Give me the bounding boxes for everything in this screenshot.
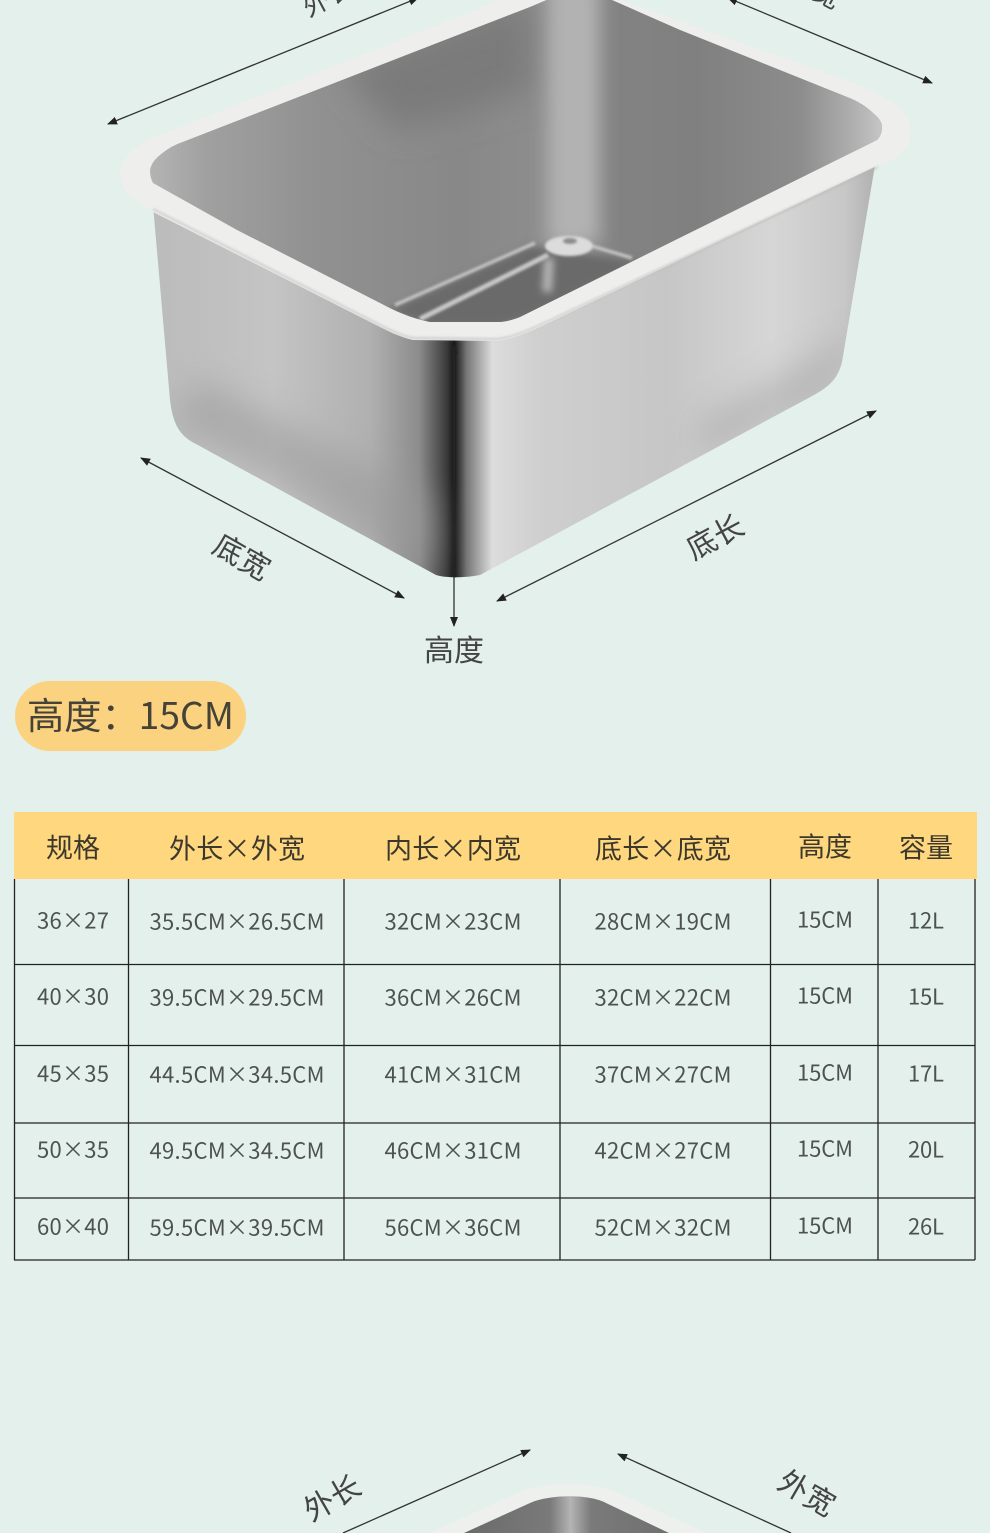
dimension arrow: outer width (bottom) xyxy=(618,1454,791,1533)
label: bottom length: 底长 xyxy=(677,501,751,569)
table row: 40×30: 15L xyxy=(908,980,944,1012)
table header row: 内长×内宽 xyxy=(385,828,521,866)
badge background xyxy=(15,681,246,751)
table row: 40×30: 39.5CM×29.5CM xyxy=(150,980,324,1012)
table row: 60×40 xyxy=(37,1208,944,1242)
dimension arrow: outer length (top) xyxy=(108,0,418,124)
dimension arrow: height xyxy=(453,345,455,626)
table row: 40×30 xyxy=(37,978,944,1012)
table row: 50×35: 49.5CM×34.5CM xyxy=(150,1134,324,1166)
table row: 36×27: 32CM×23CM xyxy=(384,904,522,936)
dimension arrow: outer length (bottom) xyxy=(343,1450,530,1533)
table row: 60×40: 52CM×32CM xyxy=(594,1210,732,1242)
table header row: 规格 xyxy=(46,826,100,866)
dimension arrow: bottom length xyxy=(497,411,876,601)
table row: 50×35: 42CM×27CM xyxy=(594,1134,732,1166)
table row: 45×35 xyxy=(37,1056,944,1090)
sink product illustration (bottom, cropped) xyxy=(429,1484,707,1533)
table row: 50×35 xyxy=(37,1132,944,1166)
table row: 45×35: 41CM×31CM xyxy=(384,1058,522,1090)
sink inner basin xyxy=(140,0,890,330)
table header row: 高度 xyxy=(798,826,852,864)
table row: 50×35: 15CM xyxy=(797,1132,853,1164)
badge text: 高度：15CM xyxy=(27,686,234,740)
table row: 36×27: 36×27 xyxy=(37,904,109,936)
basin floor xyxy=(388,246,640,326)
table row: 60×40: 15CM xyxy=(797,1208,853,1240)
table row: 60×40: 26L xyxy=(908,1210,944,1242)
label: outer width (bottom): 外宽 xyxy=(771,1457,845,1525)
table grid xyxy=(14,879,975,1260)
inner basin xyxy=(464,1496,669,1533)
table header row: 底长×底宽 xyxy=(595,828,731,866)
table row: 60×40: 60×40 xyxy=(37,1210,109,1242)
table row: 50×35: 50×35 xyxy=(37,1132,109,1164)
table row: 50×35: 20L xyxy=(908,1132,944,1164)
table row: 36×27: 28CM×19CM xyxy=(594,904,732,936)
specification table xyxy=(14,812,977,1260)
table row: 50×35: 46CM×31CM xyxy=(384,1134,522,1166)
table row: 45×35: 17L xyxy=(908,1056,944,1088)
table header row: 外长×外宽 xyxy=(169,828,305,866)
table row: 40×30: 36CM×26CM xyxy=(384,980,522,1012)
table row: 60×40: 56CM×36CM xyxy=(384,1210,522,1242)
dimension arrow: outer width (top) xyxy=(728,0,932,83)
table row: 40×30: 40×30 xyxy=(37,980,109,1012)
sink body faces xyxy=(140,160,884,590)
label: outer length (bottom): 外长 xyxy=(294,1462,368,1530)
table row: 60×40: 59.5CM×39.5CM xyxy=(150,1210,324,1242)
rim xyxy=(429,1484,707,1533)
sink rim xyxy=(120,0,910,341)
table row: 36×27: 35.5CM×26.5CM xyxy=(150,904,324,936)
table row: 36×27 xyxy=(37,902,944,936)
table row: 45×35: 37CM×27CM xyxy=(594,1058,732,1090)
label: height: 高度 xyxy=(424,626,484,670)
table header row: 容量 xyxy=(899,826,953,866)
table header row xyxy=(14,812,977,879)
table row: 45×35: 45×35 xyxy=(37,1056,109,1088)
label: bottom width: 底宽 xyxy=(206,521,280,589)
sink product illustration (top) xyxy=(120,0,910,590)
table row: 36×27: 15CM xyxy=(797,902,853,934)
rim lip shading xyxy=(153,167,878,339)
table row: 45×35: 44.5CM×34.5CM xyxy=(150,1058,324,1090)
table row: 40×30: 15CM xyxy=(797,978,853,1010)
dimension arrow: bottom width xyxy=(141,458,404,598)
table row: 45×35: 15CM xyxy=(797,1056,853,1088)
height badge xyxy=(15,681,246,751)
table row: 40×30: 32CM×22CM xyxy=(594,980,732,1012)
table row: 36×27: 12L xyxy=(908,904,944,936)
